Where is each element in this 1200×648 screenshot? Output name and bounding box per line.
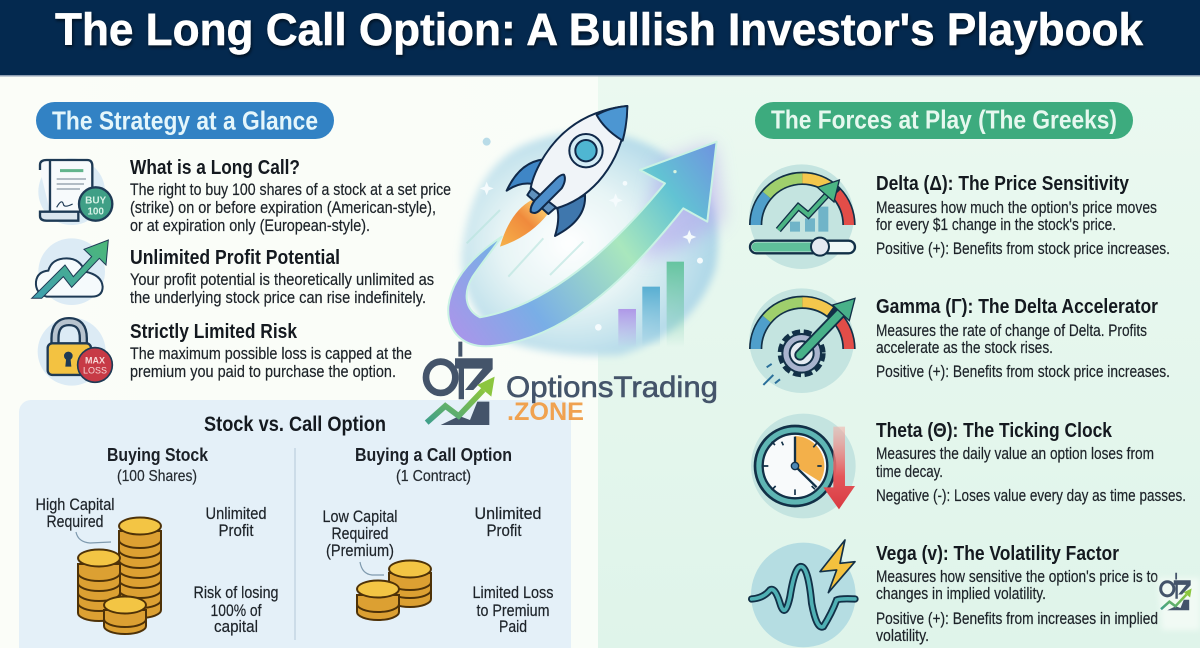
heading pill: strategy: The Strategy at a Glance xyxy=(52,106,318,136)
rocket xyxy=(500,106,627,247)
text block: theta xyxy=(876,419,1186,505)
column: buying a call option: (1 Contract) xyxy=(396,468,471,485)
column: buying a call option: Limited Loss xyxy=(472,584,554,602)
icon: theta clock xyxy=(751,414,856,518)
column: buying a call option: (Premium) xyxy=(326,542,394,560)
panel: the forces at play xyxy=(749,102,1186,647)
icon: vega wave with lightning bolt xyxy=(751,540,856,647)
logo: OptionsTrading.Zone watermark xyxy=(426,342,718,426)
rising bars xyxy=(618,262,684,347)
column: buying stock: capital xyxy=(214,618,258,636)
text block: what is a long call xyxy=(130,156,451,235)
icon: gamma gauge with gear xyxy=(749,288,855,393)
column: buying a call option: Required xyxy=(332,525,388,543)
icon: padlock with max loss badge xyxy=(38,318,112,386)
text block: delta: for every $1 change in the stock's price. xyxy=(876,216,1116,234)
text block: what is a long call: (strike) on or before expiration (American-style), xyxy=(130,199,436,217)
column: buying stock: High Capital xyxy=(36,496,114,514)
title banner xyxy=(0,0,1200,76)
icon: padlock with max loss badge: LOSS xyxy=(83,365,107,375)
text block: delta xyxy=(876,172,1170,258)
text block: strictly limited risk: The maximum possible loss is capped at the xyxy=(130,345,412,363)
panel: stock vs call option xyxy=(19,400,571,648)
text block: gamma: accelerate as the stock rises. xyxy=(876,339,1053,357)
logo wordmark: OptionsTrading xyxy=(506,371,718,404)
sparkles and dots xyxy=(480,138,703,331)
logo mark xyxy=(426,342,495,425)
column: buying stock: 100% of xyxy=(210,602,262,620)
text block: vega xyxy=(876,542,1158,645)
column: buying a call option: Paid xyxy=(499,618,527,636)
column: buying a call option: Buying a Call Option xyxy=(355,444,512,465)
motion lines xyxy=(467,210,583,277)
column: buying stock: Unlimited xyxy=(206,505,266,523)
column: buying a call option: Profit xyxy=(486,522,522,540)
icon: contract scroll with buy 100 badge: BUY xyxy=(85,195,107,206)
icon: small coin stacks xyxy=(357,560,431,620)
icon: cloud with rising arrow xyxy=(32,238,108,305)
text block: what is a long call: The right to buy 100 shares of a stock at a set price xyxy=(130,181,451,199)
text block: vega: Vega (v): The Volatility Factor xyxy=(876,542,1119,565)
panel: the strategy at a glance xyxy=(32,102,451,386)
text block: unlimited profit potential xyxy=(130,246,434,307)
column: buying a call option: Unlimited xyxy=(474,505,542,523)
icon: tall coin stacks xyxy=(78,518,161,634)
text block: vega: volatility. xyxy=(876,627,929,645)
text block: theta: time decay. xyxy=(876,463,943,481)
title banner: The Long Call Option: A Bullish Investor's Playbook xyxy=(55,4,1144,55)
column: buying a call option xyxy=(322,444,554,636)
icon: contract scroll with buy 100 badge: 100 xyxy=(87,206,104,217)
icon: padlock with max loss badge: MAX xyxy=(85,355,105,365)
column: buying a call option: to Premium xyxy=(476,602,550,620)
swoosh arrow xyxy=(448,142,717,346)
column: buying stock: Risk of losing xyxy=(194,584,278,602)
text block: theta: Theta (Θ): The Ticking Clock xyxy=(876,419,1113,442)
small corner logo watermark xyxy=(1158,573,1200,630)
purple glow behind arrow xyxy=(640,143,723,260)
text block: strictly limited risk xyxy=(130,320,412,381)
icon: contract scroll with buy 100 badge xyxy=(38,158,112,225)
icon: delta gauge xyxy=(749,164,855,269)
text block: vega: changes in implied volatility. xyxy=(876,585,1046,603)
text block: delta: Delta (Δ): The Price Sensitivity xyxy=(876,172,1130,195)
text block: strictly limited risk: Strictly Limited Risk xyxy=(130,320,297,343)
comparison heading: Stock vs. Call Option xyxy=(204,412,386,436)
text block: unlimited profit potential: Your profit potential is theoretically unlimited as xyxy=(130,271,434,289)
heading pill: greeks: The Forces at Play (The Greeks) xyxy=(771,104,1117,134)
soft backdrop blob xyxy=(462,132,718,355)
column: buying stock: Profit xyxy=(218,522,254,540)
text block: unlimited profit potential: the underlying stock price can rise indefinitely. xyxy=(130,289,426,307)
text block: gamma xyxy=(876,295,1170,381)
text block: strictly limited risk: premium you paid to purchase the option. xyxy=(130,363,396,381)
column: buying stock: Buying Stock xyxy=(107,444,209,465)
text block: gamma: Measures the rate of change of Delta. Profits xyxy=(876,322,1147,340)
column: buying stock xyxy=(36,444,278,636)
text block: gamma: Gamma (Γ): The Delta Accelerator xyxy=(876,295,1158,318)
column: buying stock: (100 Shares) xyxy=(117,468,197,485)
logo domain: .ZONE xyxy=(507,398,584,426)
text block: what is a long call: What is a Long Call? xyxy=(130,156,300,179)
column: buying a call option: Low Capital xyxy=(322,508,398,526)
text block: what is a long call: or at expiration only (European-style). xyxy=(130,217,370,235)
column: buying stock: Required xyxy=(46,513,104,531)
text block: unlimited profit potential: Unlimited Profit Potential xyxy=(130,246,340,269)
central illustration: rocket and growth arrow xyxy=(448,106,723,355)
column divider xyxy=(294,448,296,640)
